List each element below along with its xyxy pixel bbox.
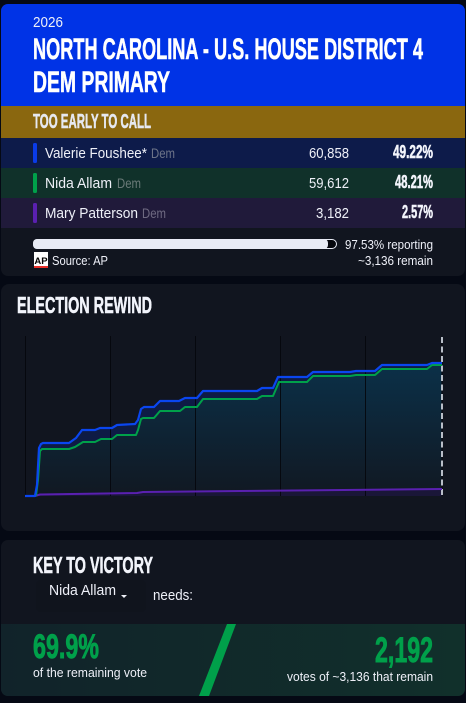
panel: key to victory: [1, 540, 465, 696]
candidate row: Valerie Foushee: Dem: [151, 146, 175, 161]
candidate row: Mary Patterson: [1, 198, 465, 228]
stat: percent needed: 69.9%: [33, 628, 99, 666]
stat caption: of the remaining vote: [33, 665, 147, 680]
status banner: TOO EARLY TO CALL: [33, 111, 151, 133]
stat: votes needed: 2,192: [375, 631, 433, 670]
candidate row: Nida Allam: 59,612: [309, 176, 349, 192]
candidate row: Valerie Foushee: Valerie Foushee*: [45, 146, 147, 162]
candidate row: Nida Allam: Dem: [117, 176, 141, 191]
candidate row: Mary Patterson: 2.57%: [402, 202, 433, 222]
progress bar: [33, 239, 336, 249]
series: Mary Patterson: [35, 489, 442, 496]
reporting text: 97.53% reporting: [345, 237, 433, 252]
remaining text: ~3,136 remain: [358, 253, 433, 268]
candidate row: Mary Patterson: Mary Patterson: [45, 206, 138, 222]
status banner: [1, 106, 465, 138]
series: Valerie Foushee: [25, 363, 442, 496]
candidate row: Nida Allam: Nida Allam: [45, 176, 112, 192]
candidate row: Nida Allam: [1, 168, 465, 198]
subtitle: DEM PRIMARY: [33, 66, 170, 99]
icon: AP logo: [34, 252, 48, 268]
panel: election rewind: [1, 284, 465, 531]
heading: ELECTION REWIND: [17, 292, 152, 318]
candidate row: Valerie Foushee: 60,858: [309, 146, 349, 162]
green stat band: [1, 624, 465, 696]
panel: race results: [1, 4, 465, 276]
dropdown: candidate: Nida Allam: [49, 583, 116, 599]
icon: AP logo: AP: [34, 256, 48, 267]
series: Nida Allam: [36, 365, 442, 496]
heading: KEY TO VICTORY: [33, 552, 153, 578]
votes caption: votes of ~3,136 that remain: [287, 669, 433, 684]
candidate row: Mary Patterson: 3,182: [316, 206, 349, 222]
year: 2026: [33, 15, 63, 31]
slash divider: [199, 624, 236, 696]
needs label: needs:: [153, 588, 193, 604]
candidate row: Valerie Foushee: [1, 138, 465, 168]
candidate row: Valerie Foushee: 49.22%: [393, 142, 433, 162]
source: Source: AP: [52, 253, 108, 268]
header band: [1, 4, 465, 106]
candidate row: Nida Allam: 48.21%: [395, 172, 433, 192]
line chart: [25, 336, 442, 496]
candidate row: Mary Patterson: Dem: [142, 206, 166, 221]
